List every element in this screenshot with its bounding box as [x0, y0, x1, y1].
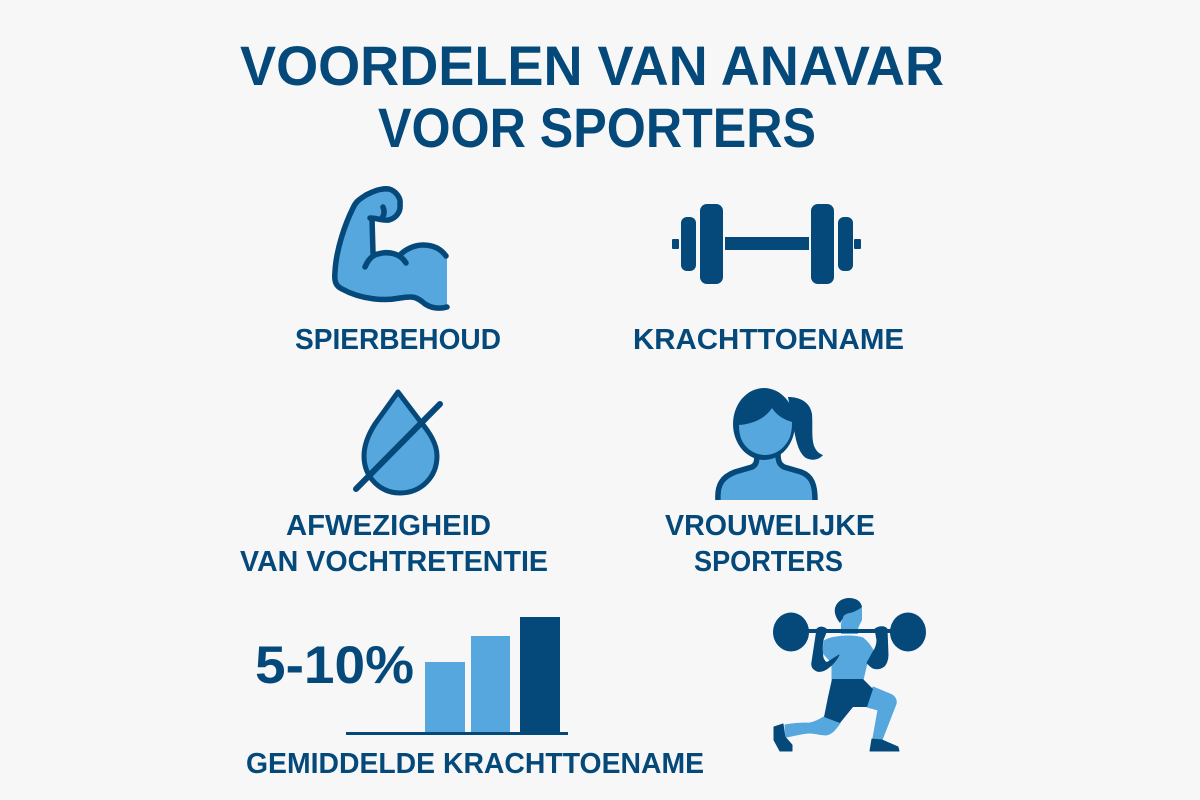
title	[240, 34, 944, 159]
label: VAN VOCHTRETENTIE	[240, 546, 548, 578]
arms	[812, 627, 888, 671]
head	[835, 598, 862, 634]
bars	[425, 617, 560, 733]
icon: woman with ponytail	[718, 388, 823, 500]
label: VROUWELIJKE	[665, 510, 875, 542]
title: VOORDELEN VAN ANAVAR	[240, 34, 944, 97]
bar chart: gemiddelde krachttoename	[246, 617, 704, 780]
label	[240, 510, 548, 578]
rear leg	[785, 717, 840, 737]
icon: barbell	[672, 204, 861, 284]
panel: krachttoename	[633, 204, 904, 356]
statistic: 5-10%	[255, 636, 414, 695]
label: SPORTERS	[694, 546, 843, 578]
label: AFWEZIGHEID	[286, 510, 491, 542]
label: GEMIDDELDE KRACHTTOENAME	[246, 748, 704, 780]
shoes	[774, 724, 899, 751]
panel: vrouwelijke sporters	[665, 388, 875, 578]
barbell	[773, 612, 926, 652]
icon: flexed bicep	[335, 189, 447, 308]
icon: crossed-out water drop	[356, 392, 440, 493]
panel: spierbehoud	[295, 189, 501, 356]
label: SPIERBEHOUD	[295, 324, 501, 356]
shorts	[824, 679, 873, 723]
title: VOOR SPORTERS	[378, 96, 816, 159]
label: KRACHTTOENAME	[633, 324, 904, 356]
torso	[823, 636, 874, 680]
front leg	[867, 687, 896, 740]
label	[665, 510, 875, 578]
icon: athlete doing barbell lunge	[773, 598, 926, 751]
panel: afwezigheid van vochtretentie	[240, 392, 548, 578]
axis	[346, 732, 568, 735]
